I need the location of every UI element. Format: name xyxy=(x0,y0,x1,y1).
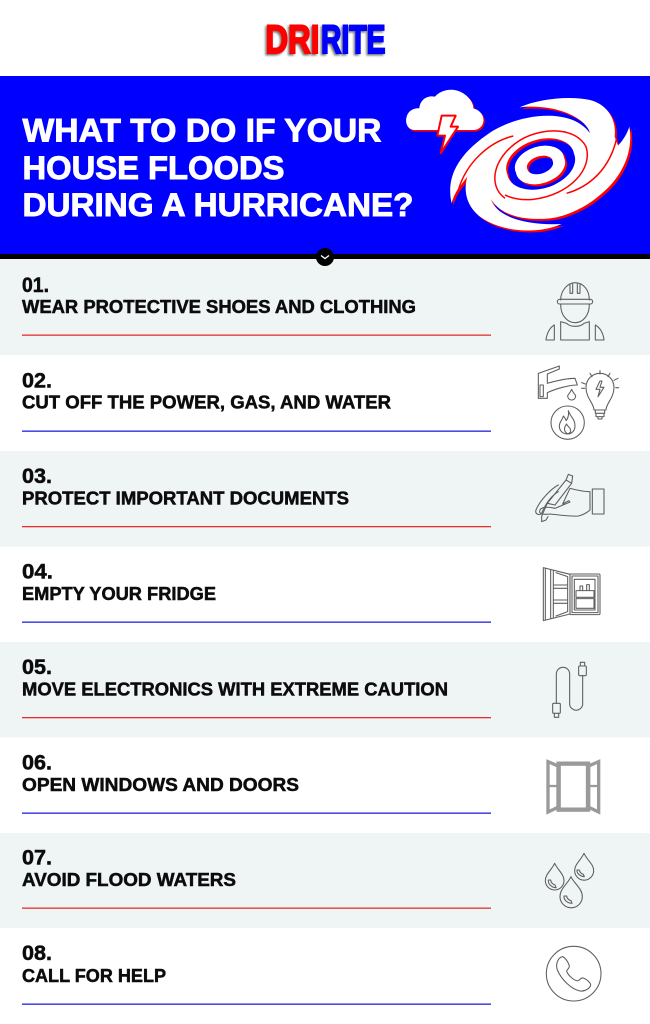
step 07: AVOID FLOOD WATERS xyxy=(22,870,236,890)
step 05 xyxy=(22,656,491,718)
icon: open window xyxy=(548,762,599,812)
step 06: OPEN WINDOWS AND DOORS xyxy=(22,775,299,795)
step 04: 04. xyxy=(22,560,53,584)
step 01 xyxy=(22,274,491,336)
icon: water drops xyxy=(545,853,594,908)
row backgrounds xyxy=(0,259,650,928)
step 05: MOVE ELECTRONICS WITH EXTREME CAUTION xyxy=(22,680,448,700)
step 08: CALL FOR HELP xyxy=(22,966,166,986)
step 03: PROTECT IMPORTANT DOCUMENTS xyxy=(22,488,349,508)
logo: DRIRITE xyxy=(266,18,386,62)
icon: worker xyxy=(546,283,604,340)
step 06 xyxy=(22,752,491,814)
step 06: 06. xyxy=(22,752,52,774)
header banner xyxy=(0,76,650,259)
title xyxy=(22,113,414,223)
step 02: CUT OFF THE POWER, GAS, AND WATER xyxy=(22,392,391,412)
icon: hand writing xyxy=(536,474,604,522)
title: WHAT TO DO IF YOUR xyxy=(22,113,382,149)
step 02: 02. xyxy=(22,370,52,392)
logo: DRIRITE: DRI xyxy=(266,18,320,62)
step 04 xyxy=(22,560,491,623)
icon: cable xyxy=(553,662,586,717)
icon: storm cloud with lightning xyxy=(406,90,485,153)
step 03 xyxy=(22,465,491,527)
step 01: 01. xyxy=(22,274,49,297)
icon: hurricane spiral xyxy=(450,98,632,232)
icon: open fridge xyxy=(543,568,600,621)
step 05: 05. xyxy=(22,656,52,679)
title: DURING A HURRICANE? xyxy=(22,187,414,223)
logo: DRIRITE: RITE xyxy=(321,18,386,62)
icon: phone in circle xyxy=(546,946,601,1001)
chevron badge xyxy=(316,248,334,266)
icon: tap, bulb and flame xyxy=(538,366,619,439)
step 07: 07. xyxy=(22,846,52,870)
step 04: EMPTY YOUR FRIDGE xyxy=(22,584,216,604)
step 03: 03. xyxy=(22,465,52,488)
step 07 xyxy=(22,846,491,909)
step 08: 08. xyxy=(22,942,52,965)
step 02 xyxy=(22,370,491,432)
step 08 xyxy=(22,942,491,1005)
title: HOUSE FLOODS xyxy=(22,150,284,186)
step 01: WEAR PROTECTIVE SHOES AND CLOTHING xyxy=(22,297,416,317)
